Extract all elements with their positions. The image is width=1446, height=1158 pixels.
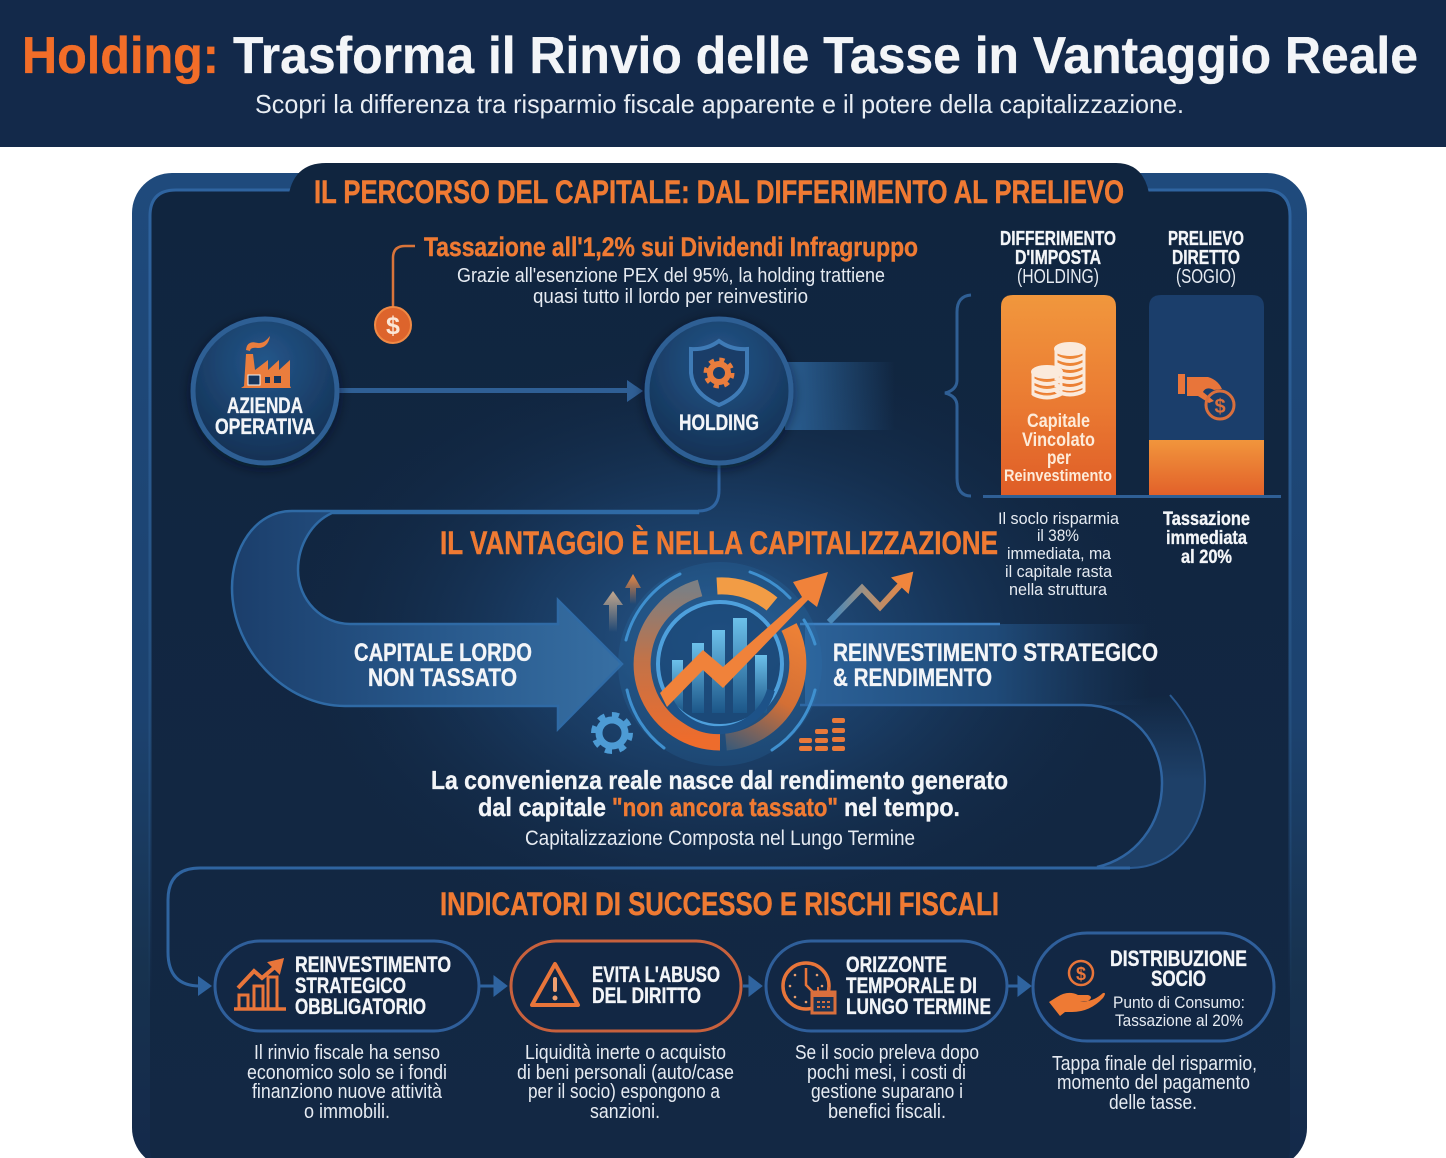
note: prelievo — [1163, 509, 1250, 568]
note: differimento: il capitale rasta — [1005, 562, 1113, 581]
blue outer arcs — [626, 572, 815, 750]
subtitle: Scopri la differenza tra risparmio fiscale apparente e il potere della capitalizzazione. — [255, 89, 1184, 119]
text: abuso description — [517, 1042, 734, 1123]
pill: orizzonte — [766, 941, 1007, 1031]
pill: distribuzione — [1033, 933, 1274, 1041]
column titles: D'IMPOSTA — [1015, 247, 1101, 269]
callout: dividend tax: Tassazione all'1,2% sui Dividendi Infragruppo — [424, 232, 918, 262]
text: distribuzione description — [1052, 1053, 1257, 1114]
arrows between pills — [480, 976, 1031, 996]
text: reinvestimento description: economico solo se i fondi — [247, 1062, 447, 1084]
note: differimento: immediata, ma — [1007, 544, 1112, 563]
column titles: (SOGIO) — [1176, 266, 1236, 288]
icon: clock with calendar — [783, 963, 835, 1013]
pill: orizzonte: TEMPORALE DI — [846, 973, 977, 998]
text block: convenienza — [431, 765, 1008, 850]
text: reinvestimento description — [247, 1042, 447, 1123]
heading: vantaggio: IL VANTAGGIO È NELLA CAPITALIZZAZIONE — [440, 525, 998, 561]
callout: dividend tax — [375, 232, 918, 343]
panel tab heading — [288, 163, 1150, 210]
node: azienda operativa: OPERATIVA — [215, 414, 315, 439]
text: distribuzione description: momento del pagamento — [1057, 1072, 1250, 1094]
callout: dividend tax: quasi tutto il lordo per reinvestirio — [533, 286, 808, 308]
panel tab heading: IL PERCORSO DEL CAPITALE: DAL DIFFERIMENTO AL PRELIEVO — [314, 174, 1124, 210]
emblem glow — [618, 562, 822, 766]
bar: differimento: Capitale — [1027, 411, 1090, 432]
column titles: DIRETTO — [1172, 247, 1240, 269]
column titles — [1000, 228, 1244, 288]
ribbon arrow: capitale lordo: NON TASSATO — [368, 664, 517, 692]
ribbon: reinvestimento: REINVESTIMENTO STRATEGICO — [833, 639, 1158, 667]
rings — [658, 602, 782, 730]
brace — [945, 295, 971, 496]
text block: convenienza: nel tempo. — [844, 792, 960, 822]
note: differimento: il 38% — [1037, 526, 1079, 545]
pill: orizzonte: ORIZZONTE — [846, 952, 947, 977]
title: Trasforma il Rinvio delle Tasse in Vantaggio Reale — [233, 27, 1418, 85]
pill: orizzonte: LUNGO TERMINE — [846, 994, 991, 1019]
text: orizzonte description: Se il socio preleva dopo — [795, 1042, 979, 1064]
header band — [0, 0, 1446, 147]
ribbon arrow: capitale lordo — [232, 511, 698, 729]
text: orizzonte description: pochi mesi, i costi di — [807, 1062, 966, 1084]
pill: evita abuso — [511, 941, 741, 1031]
icon: gear — [594, 715, 630, 751]
icon: capitalization growth emblem — [618, 562, 828, 766]
text: reinvestimento description: Il rinvio fiscale ha senso — [254, 1042, 440, 1064]
arrow — [660, 572, 828, 707]
column titles: DIFFERIMENTO — [1000, 228, 1116, 250]
note: prelievo: immediata — [1166, 528, 1247, 549]
note: prelievo: Tassazione — [1163, 509, 1250, 530]
icon: hand with coin: $ — [1214, 396, 1226, 418]
text: orizzonte description: benefici fiscali. — [828, 1101, 946, 1123]
pill: distribuzione: Tassazione al 20% — [1115, 1011, 1243, 1030]
icon: hand with coin: $ — [1076, 964, 1086, 984]
connector line to indicators — [168, 868, 1130, 996]
note: prelievo: al 20% — [1181, 547, 1232, 568]
bar: prelievo — [1149, 295, 1264, 495]
text: abuso description: di beni personali (auto/case — [517, 1062, 734, 1084]
text: abuso description: sanzioni. — [590, 1101, 660, 1123]
note: differimento — [998, 509, 1120, 599]
node: holding: HOLDING — [679, 410, 759, 435]
ribbon arrow: capitale lordo: CAPITALE LORDO — [354, 639, 532, 667]
icon: coin: $ — [386, 312, 400, 340]
band from holding to bars — [785, 362, 895, 430]
pill: evita abuso: EVITA L'ABUSO — [592, 962, 720, 987]
note: differimento: nella struttura — [1009, 580, 1108, 599]
text: distribuzione description: Tappa finale del risparmio, — [1052, 1053, 1257, 1075]
text block: convenienza: "non ancora tassato" — [612, 792, 838, 822]
node: azienda operativa — [193, 319, 337, 463]
text block: convenienza: Capitalizzazione Composta nel Lungo Termine — [525, 827, 915, 850]
title: Holding: — [22, 27, 219, 85]
text: abuso description: Liquidità inerte o acquisto — [525, 1042, 726, 1064]
arrow: azienda to holding — [336, 380, 643, 402]
text: orizzonte description — [795, 1042, 979, 1123]
pill: reinvestimento — [215, 941, 479, 1031]
icon: coin stacks — [1033, 344, 1084, 398]
bar: differimento: Reinvestimento — [1004, 466, 1112, 485]
text block: convenienza: dal capitale — [478, 792, 606, 822]
connector line from holding to ribbon — [698, 462, 719, 511]
callout: dividend tax: Grazie all'esenzione PEX del 95%, la holding trattiene — [457, 265, 885, 287]
bar: differimento: per — [1047, 448, 1071, 469]
icon: small up arrows — [603, 574, 641, 632]
text: reinvestimento description: o immobili. — [304, 1101, 390, 1123]
column titles: (HOLDING) — [1017, 266, 1099, 288]
text: reinvestimento description: finanziono nuove attività — [252, 1081, 443, 1103]
bar: differimento: Vincolato — [1022, 430, 1095, 451]
bar baseline — [983, 495, 1281, 498]
node: holding — [647, 319, 791, 463]
heading: indicatori: INDICATORI DI SUCCESSO E RISCHI FISCALI — [440, 886, 999, 922]
icon: stacked bars — [799, 718, 845, 751]
bar: differimento — [1001, 295, 1116, 495]
node: azienda operativa: AZIENDA — [227, 393, 303, 418]
pill: distribuzione: DISTRIBUZIONE — [1110, 946, 1247, 971]
icon: factory — [241, 336, 291, 388]
pill: distribuzione: SOCIO — [1151, 966, 1206, 991]
text: orizzonte description: gestione suparano i — [811, 1081, 963, 1103]
icon: growth chart — [234, 960, 286, 1009]
icon: shield with gear — [691, 341, 747, 405]
text: distribuzione description: delle tasse. — [1109, 1092, 1197, 1114]
pill: distribuzione: Punto di Consumo: — [1113, 993, 1245, 1012]
main panel — [132, 173, 1307, 1158]
pill: reinvestimento: REINVESTIMENTO — [295, 952, 451, 977]
icon: coin — [375, 307, 411, 343]
bars — [672, 618, 767, 713]
pill: reinvestimento: STRATEGICO — [295, 973, 406, 998]
ribbon: reinvestimento: & RENDIMENTO — [833, 664, 992, 692]
icon: warning triangle — [532, 964, 578, 1005]
text block: convenienza: La convenienza reale nasce dal rendimento generato — [431, 765, 1008, 795]
icon: small trend arrow — [829, 573, 912, 622]
note: differimento: Il soclo risparmia — [998, 509, 1120, 528]
column titles: PRELIEVO — [1168, 228, 1244, 250]
pill: reinvestimento: OBBLIGATORIO — [295, 994, 426, 1019]
pill: evita abuso: DEL DIRITTO — [592, 983, 701, 1008]
orange ring segments — [642, 586, 798, 742]
icon: hand with coin — [1178, 374, 1234, 419]
icon: hand with coin — [1049, 961, 1105, 1016]
ribbon: reinvestimento — [800, 624, 1205, 868]
text: abuso description: per il socio) espongono a — [528, 1081, 721, 1103]
